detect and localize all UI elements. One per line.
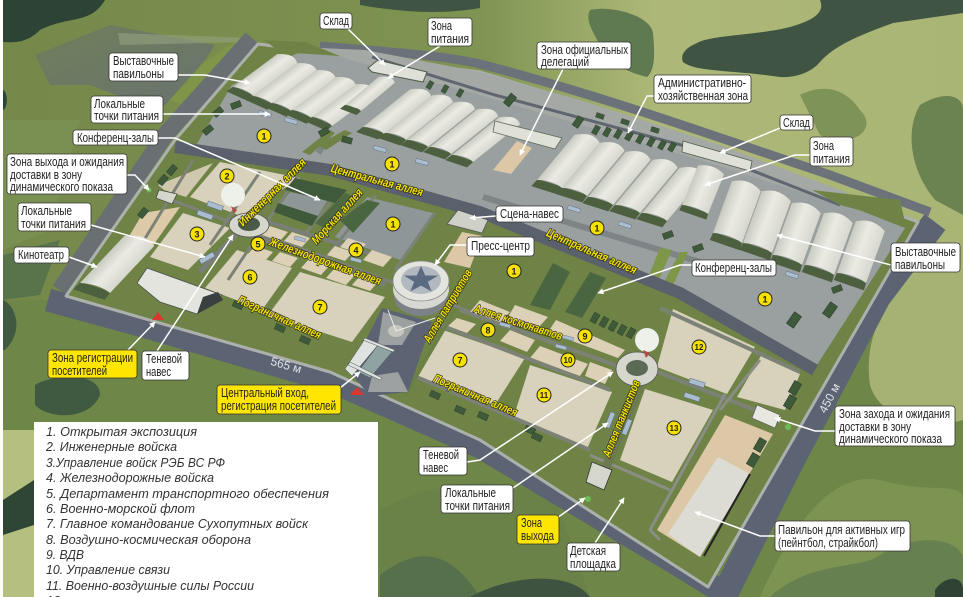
delegation building	[493, 121, 562, 149]
label: local food points bottom: точки питания	[445, 498, 510, 513]
label: warehouse right: Склад	[783, 115, 810, 130]
label: food zone top: питания	[431, 31, 469, 46]
legend panel: 3.Управление войск РЭБ ВС РФ	[46, 455, 225, 470]
label: exit zone	[517, 515, 559, 544]
zone number markers: 13	[670, 424, 679, 433]
hangars: exhibition pavilions row 3	[531, 131, 708, 227]
label: press centre	[467, 237, 534, 256]
lower-right zone fields	[405, 300, 800, 557]
zone number markers: 1	[389, 160, 395, 170]
left and bottom parked tents	[137, 164, 802, 468]
label: visitor registration zone: посетителей	[52, 363, 107, 378]
label: local food points left	[18, 203, 91, 231]
cinema hangar	[73, 232, 159, 300]
label: exit and waiting zone left: доставки в зону	[10, 167, 82, 182]
ring plaza left with balloon	[221, 183, 269, 237]
hangars: exhibition pavilions row 1	[226, 51, 380, 131]
label: children's playground: Детская	[570, 543, 606, 558]
alley names: Аллея космонавтов	[472, 301, 564, 343]
label: food zone top	[428, 18, 472, 46]
legend panel: 8. Воздушно-космическая оборона	[46, 532, 251, 547]
zone number markers: 1	[762, 294, 768, 304]
label: children's playground: площадка	[570, 556, 617, 571]
label: local food points top	[91, 96, 163, 123]
label: press centre: Пресс-центр	[471, 238, 530, 253]
legend panel: 9. ВДВ	[46, 547, 84, 562]
alley names: Железнодорожная аллея	[267, 234, 383, 288]
conference pad	[335, 197, 433, 260]
alley names: Пограничная аллея	[236, 293, 324, 342]
callout leader lines	[69, 28, 891, 543]
label: conference halls left: Конференц-залы	[77, 130, 154, 145]
alleys	[414, 308, 800, 450]
label: local food points left: Локальные	[21, 203, 72, 218]
left white edge	[0, 0, 3, 597]
legend panel: 6. Военно-морской флот	[46, 501, 195, 516]
central entrance gate	[345, 338, 395, 380]
alley names: Аллея танкистов	[599, 378, 643, 460]
label: official delegations: Зона официальных	[541, 42, 628, 57]
railway alley sand cells	[247, 226, 392, 291]
label: food zone top: Зона	[431, 18, 453, 33]
alley names: Аллея патриотов	[420, 267, 475, 346]
zone number markers: 6	[247, 272, 253, 282]
legend panel: 2. Инженерные войска	[45, 439, 177, 454]
label: exit and waiting zone left	[7, 154, 127, 194]
legend panel: 5. Департамент транспортного обеспечения	[46, 486, 329, 501]
label: local food points top: Локальные	[94, 96, 145, 111]
zone number markers: 9	[582, 332, 588, 342]
label: central entrance: регистрация посетителей	[221, 398, 336, 413]
label: exit and waiting zone left: Зона выхода и ожидания	[10, 154, 124, 169]
label: shade canopy left: навес	[146, 364, 171, 379]
zone number markers: 4	[353, 246, 359, 256]
alley names: Центральная аллея	[329, 161, 425, 199]
label: exhibition pavilions left: павильоны	[113, 66, 164, 81]
label: local food points left: точки питания	[21, 216, 86, 231]
label: active games pavilion: Павильон для активных игр	[778, 522, 905, 537]
sand cells	[447, 318, 476, 333]
lower-left zone fields	[125, 160, 640, 375]
ring plaza right with balloon	[616, 328, 659, 386]
central plaza	[345, 308, 435, 396]
label: shade canopy right: навес	[423, 460, 448, 475]
distance: 450 m: 450 м	[816, 381, 843, 415]
warehouse right	[682, 141, 752, 171]
label: active games pavilion: (пейнтбол, страйкбол)	[778, 535, 878, 550]
green conference tents right	[530, 263, 837, 342]
label: shade canopy right: Теневой	[423, 447, 459, 462]
zone number markers: 10	[564, 356, 573, 365]
hangars: exhibition pavilions row 2	[356, 86, 524, 167]
label: exit zone: выхода	[521, 528, 555, 543]
label: warehouse top: Склад	[323, 13, 349, 28]
distance: 565 m: 565 м	[269, 354, 303, 376]
hangars: exhibition pavilions row 4	[710, 177, 887, 290]
legend panel: 4. Железнодорожные войска	[46, 470, 214, 485]
hangar: food zone left	[340, 74, 398, 115]
legend panel: 10. Управление связи	[46, 562, 170, 577]
label: administrative zone	[654, 75, 751, 103]
green conference tents left	[274, 178, 380, 233]
parked buses	[258, 110, 799, 279]
label: food zone right: питания	[813, 151, 850, 166]
field 2 side	[158, 163, 213, 197]
warehouse left	[368, 60, 427, 82]
label: entry and waiting zone right: доставки в зону	[839, 419, 911, 434]
field 7 right	[415, 330, 525, 405]
label: exhibition pavilions left: Выставочные	[113, 53, 174, 68]
field 3	[150, 213, 230, 270]
alley names: Пограничная аллея	[431, 371, 520, 419]
field 3 side sand	[125, 207, 180, 250]
alley names: Центральная аллея	[544, 226, 639, 277]
zone markers	[146, 188, 791, 502]
label: local food points bottom: Локальные	[445, 485, 496, 500]
field 7 left	[268, 272, 385, 342]
shade canopy left	[137, 268, 223, 314]
label: warehouse top	[320, 13, 352, 29]
central alley	[175, 147, 815, 370]
field 6	[205, 250, 292, 310]
legend panel: 1. Открытая экспозиция	[46, 424, 197, 439]
scene canopy	[444, 210, 488, 268]
label: exhibition pavilions right	[891, 243, 960, 272]
zone number markers	[190, 129, 772, 435]
zone number markers: 3	[194, 230, 200, 240]
label: central entrance: Центральный вход,	[221, 385, 309, 400]
label: local food points top: точки питания	[94, 108, 159, 123]
conference grey pad 2	[275, 192, 328, 220]
upper exhibition ground	[195, 40, 905, 368]
field 2	[190, 162, 300, 216]
field 12	[657, 309, 755, 394]
zone number markers: 7	[457, 356, 463, 366]
label: visitor registration zone	[48, 350, 137, 378]
zone number markers: 1	[511, 266, 517, 276]
field upper right	[737, 354, 800, 410]
alley names	[235, 155, 643, 460]
legend panel	[34, 422, 378, 597]
label: active games pavilion	[775, 521, 910, 551]
label: food zone right	[810, 137, 853, 166]
zone number markers: 1	[390, 220, 396, 230]
press centre building	[393, 261, 449, 316]
field 11	[513, 365, 612, 449]
label: shade canopy right	[419, 447, 467, 475]
service tents admin zone	[202, 80, 843, 294]
label: children's playground	[567, 543, 620, 571]
label: administrative zone: хозяйственная зона	[658, 88, 749, 103]
hangar: food zone right	[679, 162, 726, 220]
alley roads	[138, 160, 640, 375]
label: conference halls right: Конференц-залы	[695, 260, 772, 275]
label: entry and waiting zone right	[835, 406, 955, 446]
top-left parking and lots	[35, 25, 250, 110]
label: official delegations: делегаций	[541, 54, 589, 69]
label: shade canopy left	[142, 351, 189, 380]
label: visitor registration zone: Зона регистрации	[52, 350, 133, 365]
small shade buildings and vehicles	[197, 201, 705, 435]
label: administrative zone: Административно-	[658, 75, 746, 90]
label: exhibition pavilions left	[109, 53, 178, 81]
label: exit zone: Зона	[521, 515, 543, 530]
delegation sand pad	[493, 141, 532, 174]
sand for games pavilion	[657, 415, 773, 557]
zone number markers: 5	[255, 240, 261, 250]
entry zone canopy	[156, 190, 780, 490]
zone number markers: 7	[317, 302, 323, 312]
zone number markers: 8	[485, 326, 491, 336]
zone number markers: 2	[224, 172, 230, 182]
label: shade canopy left: Теневой	[146, 351, 182, 366]
field 13	[620, 389, 713, 482]
zone number markers: 12	[695, 343, 704, 352]
label: stage canopy: Сцена-навес	[500, 206, 559, 221]
alley names: Инженерная аллея	[235, 155, 309, 229]
label: central entrance	[217, 385, 341, 414]
label: local food points bottom	[441, 485, 513, 513]
legend panel: 11. Военно-воздушные силы России	[46, 578, 254, 593]
label: official delegations	[537, 42, 631, 69]
legend panel: 7. Главное командование Сухопутных войск	[46, 516, 309, 531]
alley names: Морская аллея	[308, 186, 366, 247]
label: exhibition pavilions right: павильоны	[895, 257, 945, 272]
zone number markers: 11	[540, 391, 549, 400]
zone number markers: 1	[261, 132, 267, 142]
label: food zone right: Зона	[813, 138, 835, 153]
games pavilion	[668, 457, 750, 557]
zone number markers: 1	[594, 224, 600, 234]
label: cinema: Кинотеатр	[18, 247, 64, 262]
label: exit and waiting zone left: динамического показа	[10, 179, 114, 194]
